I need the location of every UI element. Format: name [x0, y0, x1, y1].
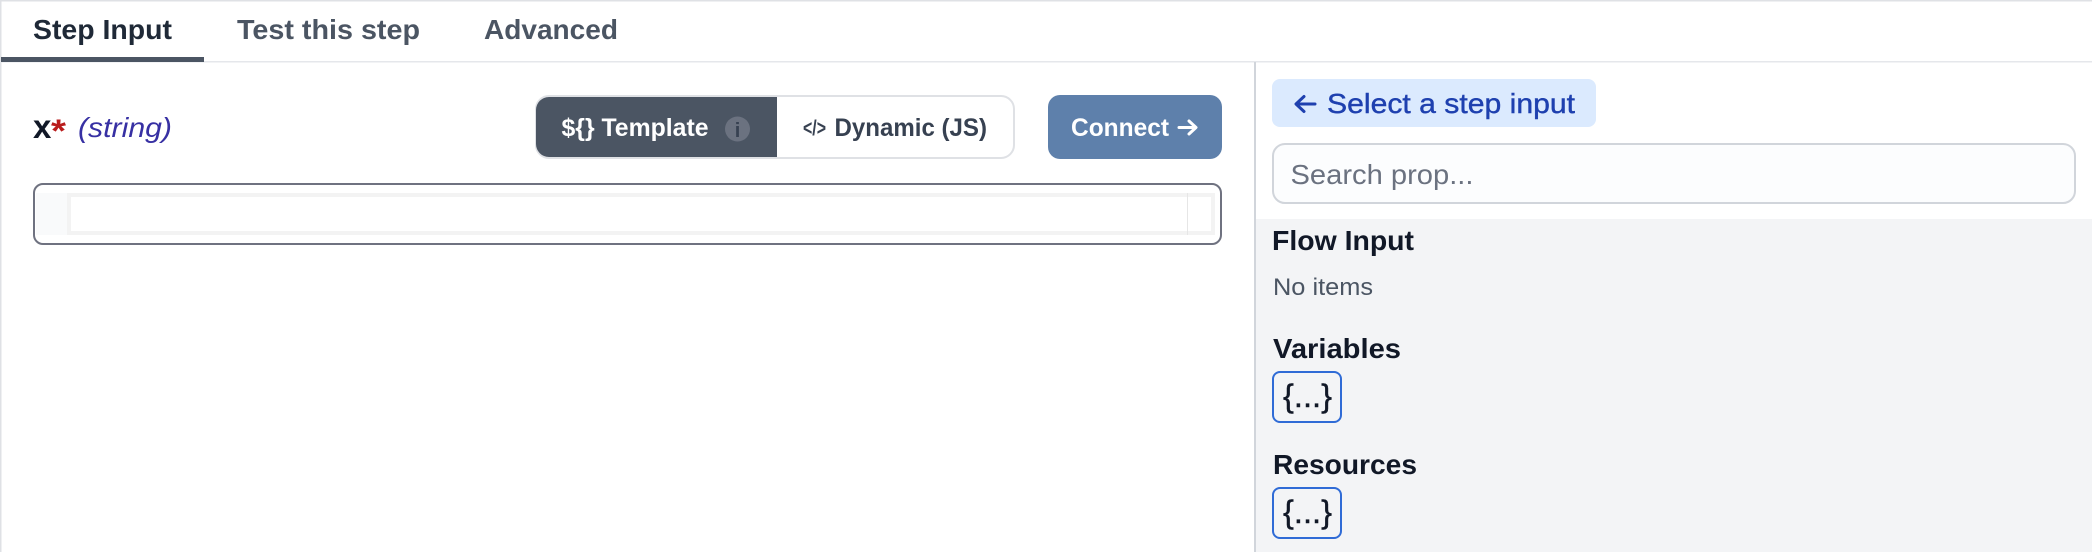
tab: Step Input (active): Step Input — [33, 14, 172, 45]
section: Variables: Variables — [1273, 333, 1401, 364]
search field — [1273, 144, 2075, 203]
toggle option: Dynamic (JS): </> — [803, 117, 826, 140]
icon: info — [725, 116, 750, 142]
section: Flow Input — [1272, 225, 1414, 301]
search field: Search prop... — [1290, 159, 1474, 190]
template input box — [34, 184, 1221, 244]
section: Flow Input: No items — [1273, 274, 1373, 301]
section: Resources: Resources — [1273, 449, 1417, 480]
connect button — [1048, 95, 1222, 159]
panel: step input editor — [33, 95, 1222, 244]
connect button: Connect — [1071, 114, 1170, 142]
field label: x required string: * — [51, 113, 67, 149]
object chip: variables: {...} — [1283, 378, 1332, 414]
section: Resources — [1273, 449, 1417, 538]
field label: x required string: (string) — [78, 112, 172, 143]
section: Flow Input: Flow Input — [1272, 225, 1414, 256]
toggle option: Template (selected) — [536, 97, 777, 157]
icon: left arrow — [1296, 96, 1315, 112]
object chip: resources — [1273, 488, 1341, 538]
panel: property list — [1256, 219, 2092, 552]
toggle option: Template (selected): ${} Template — [562, 114, 709, 142]
tab: Advanced: Advanced — [484, 14, 618, 45]
field label: x required string: x — [33, 108, 52, 145]
panel: select a step input — [1256, 79, 2092, 552]
tab bar — [1, 14, 618, 62]
toggle option: Dynamic (JS): Dynamic (JS) — [834, 114, 987, 142]
button: select a step input: Select a step input — [1327, 88, 1575, 119]
object chip: resources: {...} — [1283, 494, 1332, 530]
tab: Step Input (active) — [1, 14, 204, 62]
button: select a step input — [1272, 79, 1596, 127]
section: Variables — [1273, 333, 1401, 422]
tab: Test this step: Test this step — [237, 14, 420, 45]
field label: x required string — [33, 108, 172, 149]
icon: info: i — [735, 120, 740, 142]
icon: right arrow — [1179, 121, 1196, 134]
mode toggle: Template / Dynamic — [536, 96, 1014, 158]
